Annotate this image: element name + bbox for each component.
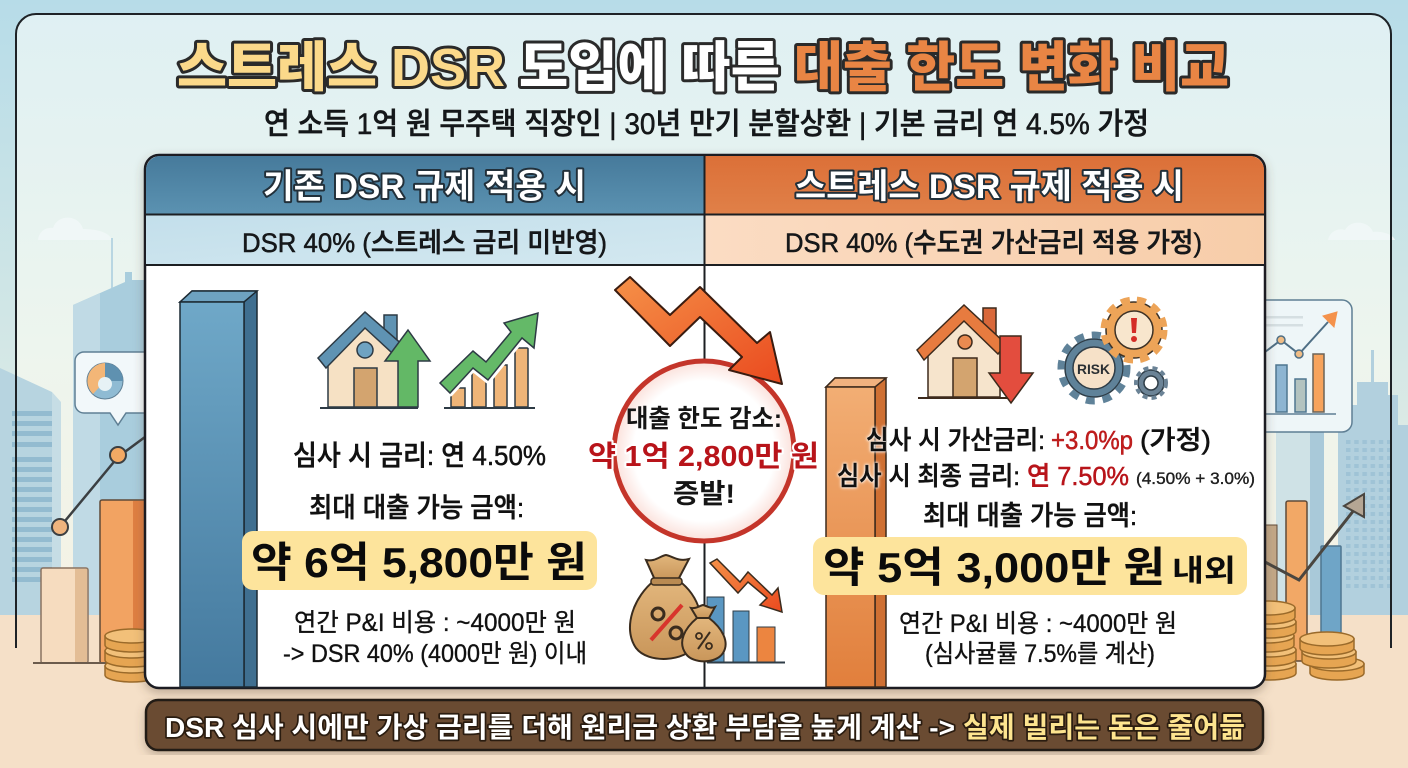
sub header: existing: DSR 40% (스트레스 금리 미반영) bbox=[242, 228, 607, 258]
skyline left bbox=[0, 238, 145, 615]
highlight: amount after bbox=[813, 537, 1247, 595]
big bag bbox=[630, 555, 702, 659]
right panel text: 최대 대출 가능 금액: bbox=[923, 501, 1137, 531]
highlight: amount after: 약 5억 3,000만 원 bbox=[823, 544, 1165, 591]
line: additional rate: (가정) bbox=[1140, 425, 1211, 455]
right panel text: (심사귤률 7.5%를 계산) bbox=[925, 640, 1155, 668]
subtitle: 연 소득 1억 원 무주택 직장인 | 30년 만기 분할상환 | 기본 금리 연 4.5% 가정 bbox=[264, 108, 1149, 141]
main comparison panel bbox=[145, 155, 1265, 688]
left panel text: 심사 시 금리: 연 4.50% bbox=[293, 440, 546, 471]
arrow: large zigzag down bbox=[615, 277, 782, 384]
icon: risk gears bbox=[1061, 300, 1166, 401]
tall blue bar bbox=[180, 291, 257, 687]
line: final rate bbox=[837, 461, 1255, 491]
footer banner: DSR 심사 시에만 가상 금리를 더해 원리금 상환 부담을 높게 계산 -> bbox=[165, 712, 955, 743]
bars bbox=[1262, 525, 1277, 655]
title: DSR bbox=[391, 38, 505, 98]
small bag bbox=[682, 605, 726, 661]
sub header: stress bbox=[704, 215, 1264, 265]
line: additional rate bbox=[866, 425, 1211, 455]
mini chart bars bbox=[707, 597, 785, 662]
panel header: existing DSR: 기존 DSR 규제 적용 시 bbox=[263, 168, 586, 206]
callout: reduction circle bbox=[588, 361, 819, 541]
orange bar bbox=[100, 500, 150, 663]
trend line bbox=[60, 437, 145, 527]
line: final rate: 연 7.50% bbox=[1027, 461, 1129, 491]
left panel text: -> DSR 40% (4000만 원) 이내 bbox=[283, 640, 587, 668]
title: 대출 한도 변화 비교 bbox=[794, 38, 1229, 98]
small down arrow bbox=[710, 559, 782, 612]
panel header: existing DSR bbox=[146, 156, 704, 214]
left panel text: 최대 대출 가능 금액: bbox=[309, 493, 524, 523]
left panel text bbox=[242, 440, 597, 668]
footer banner: 실제 빌리는 돈은 줄어듦 bbox=[963, 712, 1245, 743]
orange bar bbox=[826, 378, 886, 687]
callout: reduction circle: 약 1억 2,800만 원 bbox=[588, 440, 819, 473]
title: 스트레스 bbox=[177, 38, 377, 98]
sub header: existing bbox=[146, 215, 704, 265]
beige bar bbox=[41, 568, 88, 663]
clouds bbox=[38, 218, 1395, 240]
gear: risk: RISK bbox=[1077, 361, 1110, 377]
panel header: stress DSR bbox=[704, 156, 1264, 214]
panel header: stress DSR: 스트레스 DSR 규제 적용 시 bbox=[795, 168, 1184, 206]
callout: reduction circle: 증발! bbox=[673, 479, 735, 509]
highlight: amount before: 약 6억 5,800만 원 bbox=[251, 539, 587, 586]
footer banner bbox=[146, 700, 1263, 750]
coin stacks bbox=[1240, 601, 1364, 680]
left scenery: charts and coins bbox=[33, 352, 159, 682]
icon: money bags bbox=[630, 555, 785, 662]
sub header: stress: DSR 40% (수도권 가산금리 적용 가정) bbox=[785, 228, 1202, 258]
line: additional rate: 심사 시 가산금리: bbox=[866, 425, 1045, 455]
skyline right bbox=[1276, 350, 1408, 615]
floor bbox=[0, 615, 1408, 768]
chart card bbox=[1240, 300, 1352, 432]
line: additional rate: +3.0%p bbox=[1051, 425, 1133, 455]
title bbox=[177, 38, 1229, 98]
trend arrow bbox=[1265, 505, 1358, 580]
line: final rate: (4.50% + 3.0%) bbox=[1136, 470, 1255, 488]
left panel text: 연간 P&I 비용 : ~4000만 원 bbox=[294, 609, 576, 637]
gear: warning bbox=[1104, 300, 1164, 360]
gear: small bbox=[1136, 368, 1166, 398]
line: final rate: 심사 시 최종 금리: bbox=[837, 461, 1020, 491]
icon: rising bar chart with green arrow bbox=[440, 313, 538, 408]
right panel text bbox=[813, 425, 1255, 668]
title: 도입에 따른 bbox=[519, 38, 780, 98]
icon: house with up arrow bbox=[318, 312, 430, 408]
speech bubble with pie chart bbox=[75, 352, 150, 425]
callout: reduction circle: 대출 한도 감소: bbox=[626, 405, 782, 433]
icon: house with down arrow bbox=[917, 305, 1033, 403]
right panel text: 연간 P&I 비용 : ~4000만 원 bbox=[899, 610, 1177, 638]
coin stack bbox=[105, 629, 159, 682]
highlight: amount after: 내외 bbox=[1172, 555, 1236, 588]
right scenery: chart card, bars and coins bbox=[1240, 300, 1364, 680]
